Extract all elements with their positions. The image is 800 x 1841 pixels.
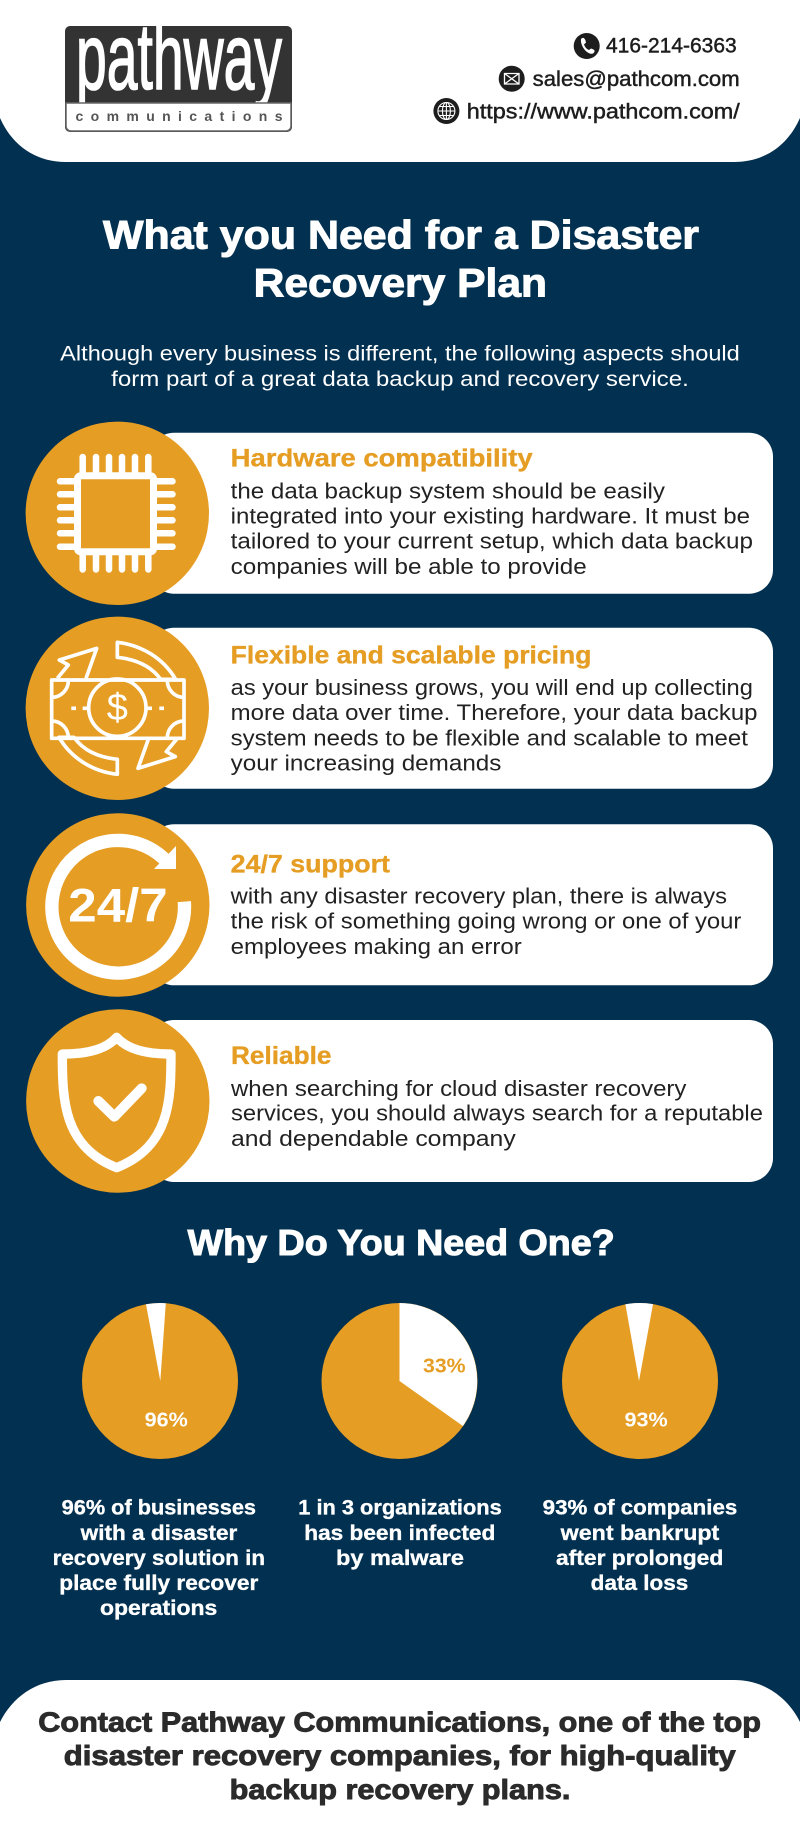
body text: system needs to be flexible and scalable to meet <box>231 726 748 751</box>
footer panel <box>0 1680 800 1841</box>
panel: 24/7 support <box>26 813 773 997</box>
heading: Reliable <box>231 1042 331 1070</box>
pie chart: 33%: 33% <box>423 1355 466 1377</box>
contact: email: sales@pathcom.com <box>533 68 740 91</box>
call to action <box>38 1707 761 1805</box>
body text: more data over time. Therefore, your data backup <box>231 700 757 725</box>
stat text: 96%: place fully recover <box>59 1572 258 1595</box>
stat text: 96%: operations <box>100 1597 217 1620</box>
logo: pathway communications <box>65 26 292 132</box>
pie chart: 96% <box>82 1303 238 1459</box>
body text: with any disaster recovery plan, there is always <box>230 883 727 908</box>
stat text: 96%: with a disaster <box>80 1522 237 1545</box>
logo: pathway communications: communications <box>76 108 283 124</box>
stat text: 1 in 3: by malware <box>336 1547 464 1570</box>
body text: companies will be able to provide <box>231 554 587 579</box>
body text: tailored to your current setup, which data backup <box>231 529 753 554</box>
contact: phone: 416-214-6363 <box>606 34 737 57</box>
stat text: 93% <box>543 1496 737 1595</box>
pie chart: 93%: 93% <box>624 1410 668 1432</box>
body text: when searching for cloud disaster recovery <box>230 1076 686 1101</box>
icon: microchip <box>26 422 209 605</box>
body text: employees making an error <box>231 934 522 959</box>
header panel <box>0 0 800 162</box>
heading: Hardware compatibility <box>231 445 533 473</box>
contact: website: https://www.pathcom.com/ <box>467 100 740 123</box>
body text: integrated into your existing hardware. It must be <box>231 503 750 528</box>
body text: the risk of something going wrong or one of your <box>231 908 741 933</box>
section heading: Why Do You Need One? <box>188 1222 615 1263</box>
body text: your increasing demands <box>231 751 501 776</box>
body text: as your business grows, you will end up collecting <box>231 675 753 700</box>
intro text <box>60 343 740 391</box>
heading: 24/7 support <box>231 851 391 879</box>
body text <box>230 1076 763 1151</box>
body text: and dependable company <box>231 1126 516 1151</box>
icon: shield with check <box>26 1009 210 1193</box>
intro text: form part of a great data backup and recovery service. <box>111 368 689 391</box>
body text: services, you should always search for a reputable <box>231 1101 763 1126</box>
stat text: 1 in 3 <box>298 1496 502 1570</box>
icon: money with arrows <box>26 617 209 800</box>
stat text: 96% <box>53 1496 265 1620</box>
icon: 24/7 circular arrow: 24/7 <box>68 879 168 932</box>
logo: pathway communications: pathway <box>76 4 282 109</box>
pie chart: 93% <box>562 1303 718 1459</box>
heading: Flexible and scalable pricing <box>231 641 591 669</box>
stat text: 93%: data loss <box>591 1572 688 1595</box>
icon: money with arrows: $ <box>107 687 128 729</box>
call to action: Contact Pathway Communications, one of the top <box>38 1707 761 1738</box>
stat text: 96%: recovery solution in <box>53 1547 265 1570</box>
intro text: Although every business is different, the following aspects should <box>60 343 740 366</box>
stat text: 96%: 96% of businesses <box>62 1496 256 1519</box>
body text <box>231 478 753 579</box>
pie chart: 33% <box>322 1303 478 1459</box>
stat text: 93%: 93% of companies <box>543 1496 737 1519</box>
call to action: disaster recovery companies, for high-quality <box>64 1740 736 1771</box>
call to action: backup recovery plans. <box>230 1774 570 1805</box>
panel: reliable <box>26 1009 773 1193</box>
panel: hardware compatibility <box>26 422 773 605</box>
pie chart: 96%: 96% <box>145 1410 188 1432</box>
stat text: 93%: after prolonged <box>556 1547 723 1570</box>
body text <box>231 675 757 776</box>
title: Recovery Plan <box>254 262 547 306</box>
stat text: 1 in 3: 1 in 3 organizations <box>298 1496 502 1519</box>
title <box>103 213 699 306</box>
icon: 24/7 circular arrow <box>26 813 210 997</box>
body text: the data backup system should be easily <box>231 478 665 503</box>
body text <box>230 883 741 959</box>
title: What you Need for a Disaster <box>103 213 699 257</box>
panel: flexible and scalable pricing <box>26 617 773 800</box>
stat text: 1 in 3: has been infected <box>304 1522 495 1545</box>
stat text: 93%: went bankrupt <box>560 1522 719 1545</box>
